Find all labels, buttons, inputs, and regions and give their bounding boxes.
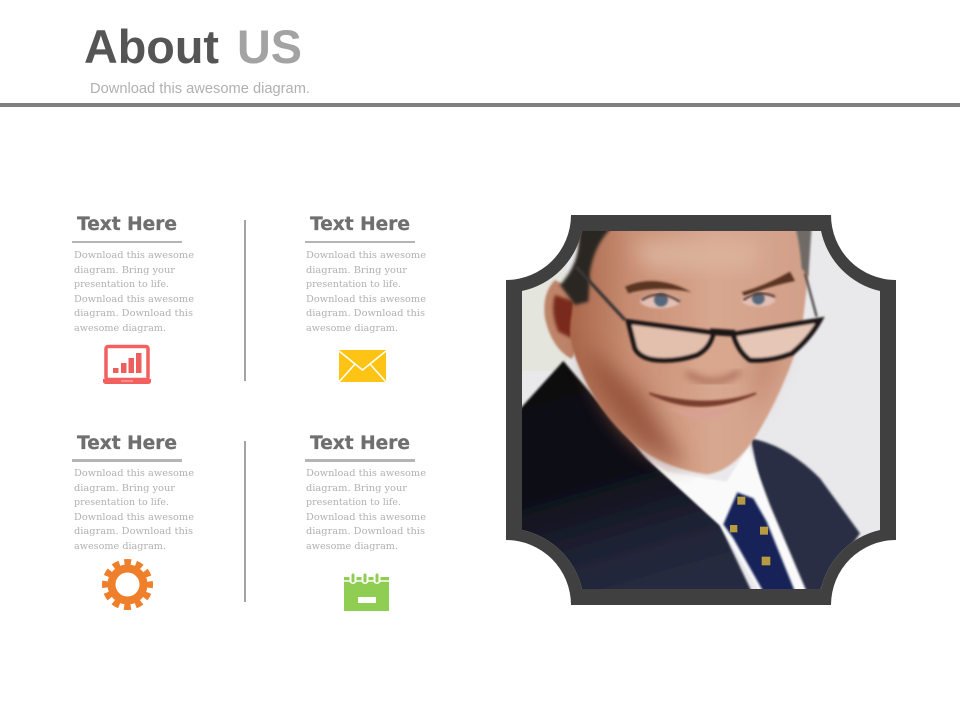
text block: top right: [306, 250, 426, 334]
nose and mouth: [690, 338, 740, 376]
heading: top left: Text Here: [77, 214, 177, 235]
title: About: [84, 20, 219, 73]
glasses: [576, 267, 820, 360]
photo frame: [506, 215, 896, 605]
icon: laptop with bar chart: [103, 346, 151, 384]
eyes: [640, 294, 680, 308]
panel: bottom left item: [72, 433, 194, 606]
ear: [543, 279, 575, 360]
text block: bottom left: awesome diagram.: [74, 541, 166, 552]
suit right: [751, 438, 860, 592]
text block: top left: Download this awesome: [74, 250, 194, 261]
tie: [723, 492, 795, 592]
text block: top left: [74, 250, 194, 334]
suit left: [513, 361, 753, 595]
text block: top left: awesome diagram.: [74, 323, 166, 334]
text block: bottom left: [74, 468, 194, 552]
text block: bottom right: presentation to life.: [306, 497, 401, 508]
text block: top right: Download this awesome: [306, 250, 426, 261]
text block: top right: presentation to life.: [306, 279, 401, 290]
text block: top left: diagram. Download this: [74, 308, 193, 319]
heading: top right: Text Here: [310, 214, 410, 235]
panel: top left item: [72, 214, 194, 384]
text block: bottom right: Download this awesome: [306, 512, 426, 523]
text block: top left: Download this awesome: [74, 294, 194, 305]
text block: bottom right: diagram. Download this: [306, 526, 425, 537]
text block: bottom left: diagram. Bring your: [74, 483, 175, 494]
text block: top left: diagram. Bring your: [74, 265, 175, 276]
text block: bottom right: awesome diagram.: [306, 541, 398, 552]
hair: [560, 225, 615, 305]
portrait photo illustration: [513, 225, 880, 595]
face: [570, 228, 808, 474]
title: US: [237, 20, 302, 73]
text block: bottom left: presentation to life.: [74, 497, 169, 508]
shirt: [643, 447, 807, 592]
text block: top right: awesome diagram.: [306, 323, 398, 334]
title: [84, 20, 302, 73]
text block: bottom right: Download this awesome: [306, 468, 426, 479]
icon: notepad: [344, 574, 389, 611]
text block: top left: presentation to life.: [74, 279, 169, 290]
text block: bottom left: diagram. Download this: [74, 526, 193, 537]
text block: top right: Download this awesome: [306, 294, 426, 305]
text block: top right: diagram. Download this: [306, 308, 425, 319]
heading: bottom right: Text Here: [310, 433, 410, 454]
text block: bottom left: Download this awesome: [74, 468, 194, 479]
text block: bottom right: diagram. Bring your: [306, 483, 407, 494]
eyebrows: [625, 281, 692, 293]
text block: bottom left: Download this awesome: [74, 512, 194, 523]
heading: bottom left: Text Here: [77, 433, 177, 454]
panel: bottom right item: [305, 433, 426, 611]
panel: top right item: [305, 214, 426, 382]
text block: bottom right: [306, 468, 426, 552]
text block: top right: diagram. Bring your: [306, 265, 407, 276]
icon: gear: [106, 562, 150, 606]
subtitle: Download this awesome diagram.: [90, 81, 310, 97]
icon: envelope: [339, 350, 386, 382]
